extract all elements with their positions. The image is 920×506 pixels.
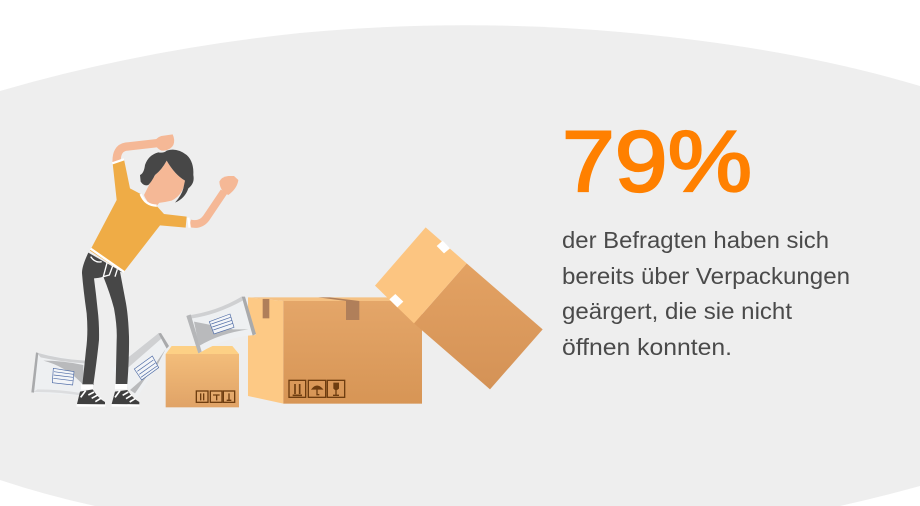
trousers	[82, 253, 129, 385]
t-shirt	[90, 159, 187, 273]
tape on box	[263, 297, 359, 320]
box top edge	[248, 297, 422, 301]
hair	[140, 150, 194, 203]
box left side	[248, 297, 283, 404]
statistic: 79%: 79%	[562, 114, 752, 210]
right shoe	[112, 390, 139, 407]
trouser pocket details	[91, 257, 117, 277]
box front side	[283, 301, 422, 404]
body text: der Befragten haben sich	[562, 227, 829, 253]
open lid: dark flap	[414, 263, 543, 389]
left foil bag	[31, 352, 85, 396]
handling icons on big box	[289, 380, 345, 397]
body text: öffnen konnten.	[562, 334, 732, 360]
white tape pieces	[389, 241, 450, 307]
lowered arm and fist	[190, 176, 238, 224]
small scene: bags, small box and person	[31, 253, 256, 407]
middle foil bag	[112, 333, 169, 398]
person legs	[77, 253, 139, 407]
raised arm and fist	[117, 134, 174, 163]
right foil bag	[186, 297, 256, 353]
handling icons on small box	[196, 391, 235, 402]
body text	[562, 227, 850, 360]
face	[144, 161, 185, 203]
body text: geärgert, die sie nicht	[562, 298, 792, 324]
neck	[144, 177, 167, 206]
body text: bereits über Verpackungen	[562, 263, 850, 289]
person upper body	[90, 134, 238, 273]
shirt trim	[91, 159, 190, 272]
big open cardboard box	[248, 227, 543, 404]
left shoe	[77, 389, 105, 407]
socks	[81, 384, 93, 390]
open lid: light flap	[375, 227, 467, 323]
small cardboard box	[166, 346, 239, 407]
